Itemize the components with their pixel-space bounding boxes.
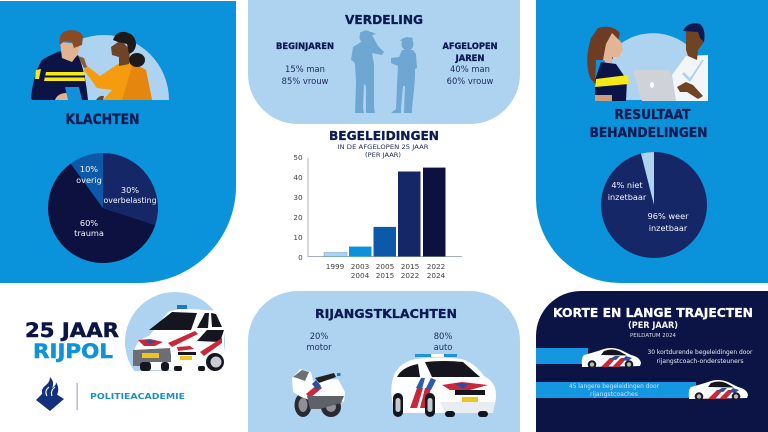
text: korte trajecten: [648, 349, 753, 365]
text: afgelopen jaren: JAREN: [455, 53, 484, 63]
subtitle: [338, 144, 429, 159]
label: motor: [306, 331, 332, 352]
bar chart: 2003: [351, 262, 370, 271]
bar chart: 1999: [326, 262, 345, 271]
bar chart: 2005: [376, 262, 394, 271]
heading: resultaat behandelingen: BEHANDELINGEN: [590, 126, 708, 141]
pie chart: resultaat: 96% weer: [648, 211, 689, 221]
pie chart: resultaat: inzetbaar: [649, 223, 688, 233]
heading: klachten: KLACHTEN: [66, 112, 140, 128]
bar: korte trajecten: [536, 348, 641, 369]
text: beginjaren: BEGINJAREN: [276, 41, 334, 51]
panel: resultaat behandelingen: [536, 0, 768, 283]
panel: rijangstklachten: [248, 291, 520, 432]
heading: rijangstklachten: RIJANGSTKLACHTEN: [315, 306, 457, 321]
bar chart: 2015: [376, 271, 394, 280]
illustration: officer and doctor: [587, 23, 708, 101]
text: korte trajecten: 30 kortdurende begeleidingen door: [648, 349, 753, 356]
text: afgelopen jaren: AFGELOPEN: [442, 41, 498, 51]
pie chart: klachten: 10%: [80, 164, 98, 174]
bar chart: 2022: [401, 271, 419, 280]
heading: resultaat behandelingen: [590, 108, 708, 141]
panel: korte en lange trajecten: [536, 291, 768, 432]
label: auto: auto: [434, 342, 452, 352]
bar chart: 2024: [427, 271, 446, 280]
title: 25 jaar rijpol: [25, 319, 119, 363]
subtitle: IN DE AFGELOPEN 25 JAAR: [338, 144, 429, 151]
panel: verdeling: [248, 0, 520, 124]
bar chart: 2022: [427, 262, 445, 271]
heading: korte en lange trajecten: PEILDATUM 2024: [630, 333, 676, 339]
text: afgelopen jaren: 40% man: [450, 64, 490, 74]
pie chart: resultaat: 4% niet: [611, 180, 643, 190]
pie chart: klachten: 60%: [80, 218, 98, 228]
subtitle: (PER JAAR): [365, 152, 401, 159]
title: 25 jaar rijpol: 25 JAAR: [25, 319, 119, 342]
heading: resultaat behandelingen: RESULTAAT: [614, 108, 691, 123]
label: motor: motor: [306, 342, 332, 352]
title: 25 jaar rijpol: RIJPOL: [33, 340, 113, 363]
text: beginjaren: 15% man: [285, 64, 325, 74]
bar chart: 40: [293, 173, 303, 182]
pie chart: klachten: overbelasting: [104, 195, 156, 205]
bar chart: 0: [298, 253, 303, 262]
bar chart: [293, 153, 462, 280]
pie chart: resultaat: inzetbaar: [608, 192, 647, 202]
heading: korte en lange trajecten: KORTE EN LANGE TRAJECTEN: [553, 305, 753, 320]
bar chart: 10: [293, 233, 303, 242]
bar chart: 50: [293, 153, 303, 162]
logo: politieacademie: [36, 377, 185, 411]
panel: begeleidingen: [293, 128, 462, 280]
bar: lange trajecten: [536, 380, 748, 401]
illustration: police cars: [125, 292, 225, 371]
text: beginjaren: 85% vrouw: [282, 76, 329, 86]
heading: korte en lange trajecten: (PER JAAR): [628, 321, 678, 331]
text: afgelopen jaren: [442, 41, 498, 86]
pie chart: klachten: [48, 153, 158, 263]
bar chart: 2004: [351, 271, 370, 280]
panel: 25 jaar rijpol: [25, 292, 225, 411]
label: auto: [434, 331, 452, 352]
text: lange trajecten: 45 langere begeleidingen door: [569, 383, 660, 390]
bar chart: 2015: [401, 262, 419, 271]
heading: begeleidingen: BEGELEIDINGEN: [329, 128, 439, 143]
icon: police car: [391, 354, 496, 417]
text: lange trajecten: rijangstcoaches: [590, 391, 638, 398]
label: motor: 20%: [310, 331, 328, 341]
heading: korte en lange trajecten: [553, 305, 753, 339]
panel: klachten: [0, 1, 236, 283]
text: korte trajecten: rijangstcoach-ondersteuners: [656, 358, 744, 365]
icon: two officers silhouette: [351, 30, 417, 113]
bar chart: 30: [293, 193, 303, 202]
label: auto: 80%: [434, 331, 452, 341]
pie chart: klachten: overig: [76, 175, 102, 185]
illustration: officer and counsellor: [31, 30, 169, 100]
text: afgelopen jaren: 60% vrouw: [447, 76, 494, 86]
pie chart: resultaat: [601, 152, 707, 258]
pie chart: klachten: 30%: [121, 185, 139, 195]
text: beginjaren: [276, 41, 334, 86]
heading: verdeling: VERDELING: [345, 12, 423, 27]
bar chart: 20: [293, 213, 303, 222]
logo: politieacademie: POLITIEACADEMIE: [90, 392, 185, 401]
pie chart: klachten: trauma: [74, 228, 104, 238]
text: lange trajecten: [569, 383, 660, 398]
icon: motorcycle: [292, 369, 345, 417]
